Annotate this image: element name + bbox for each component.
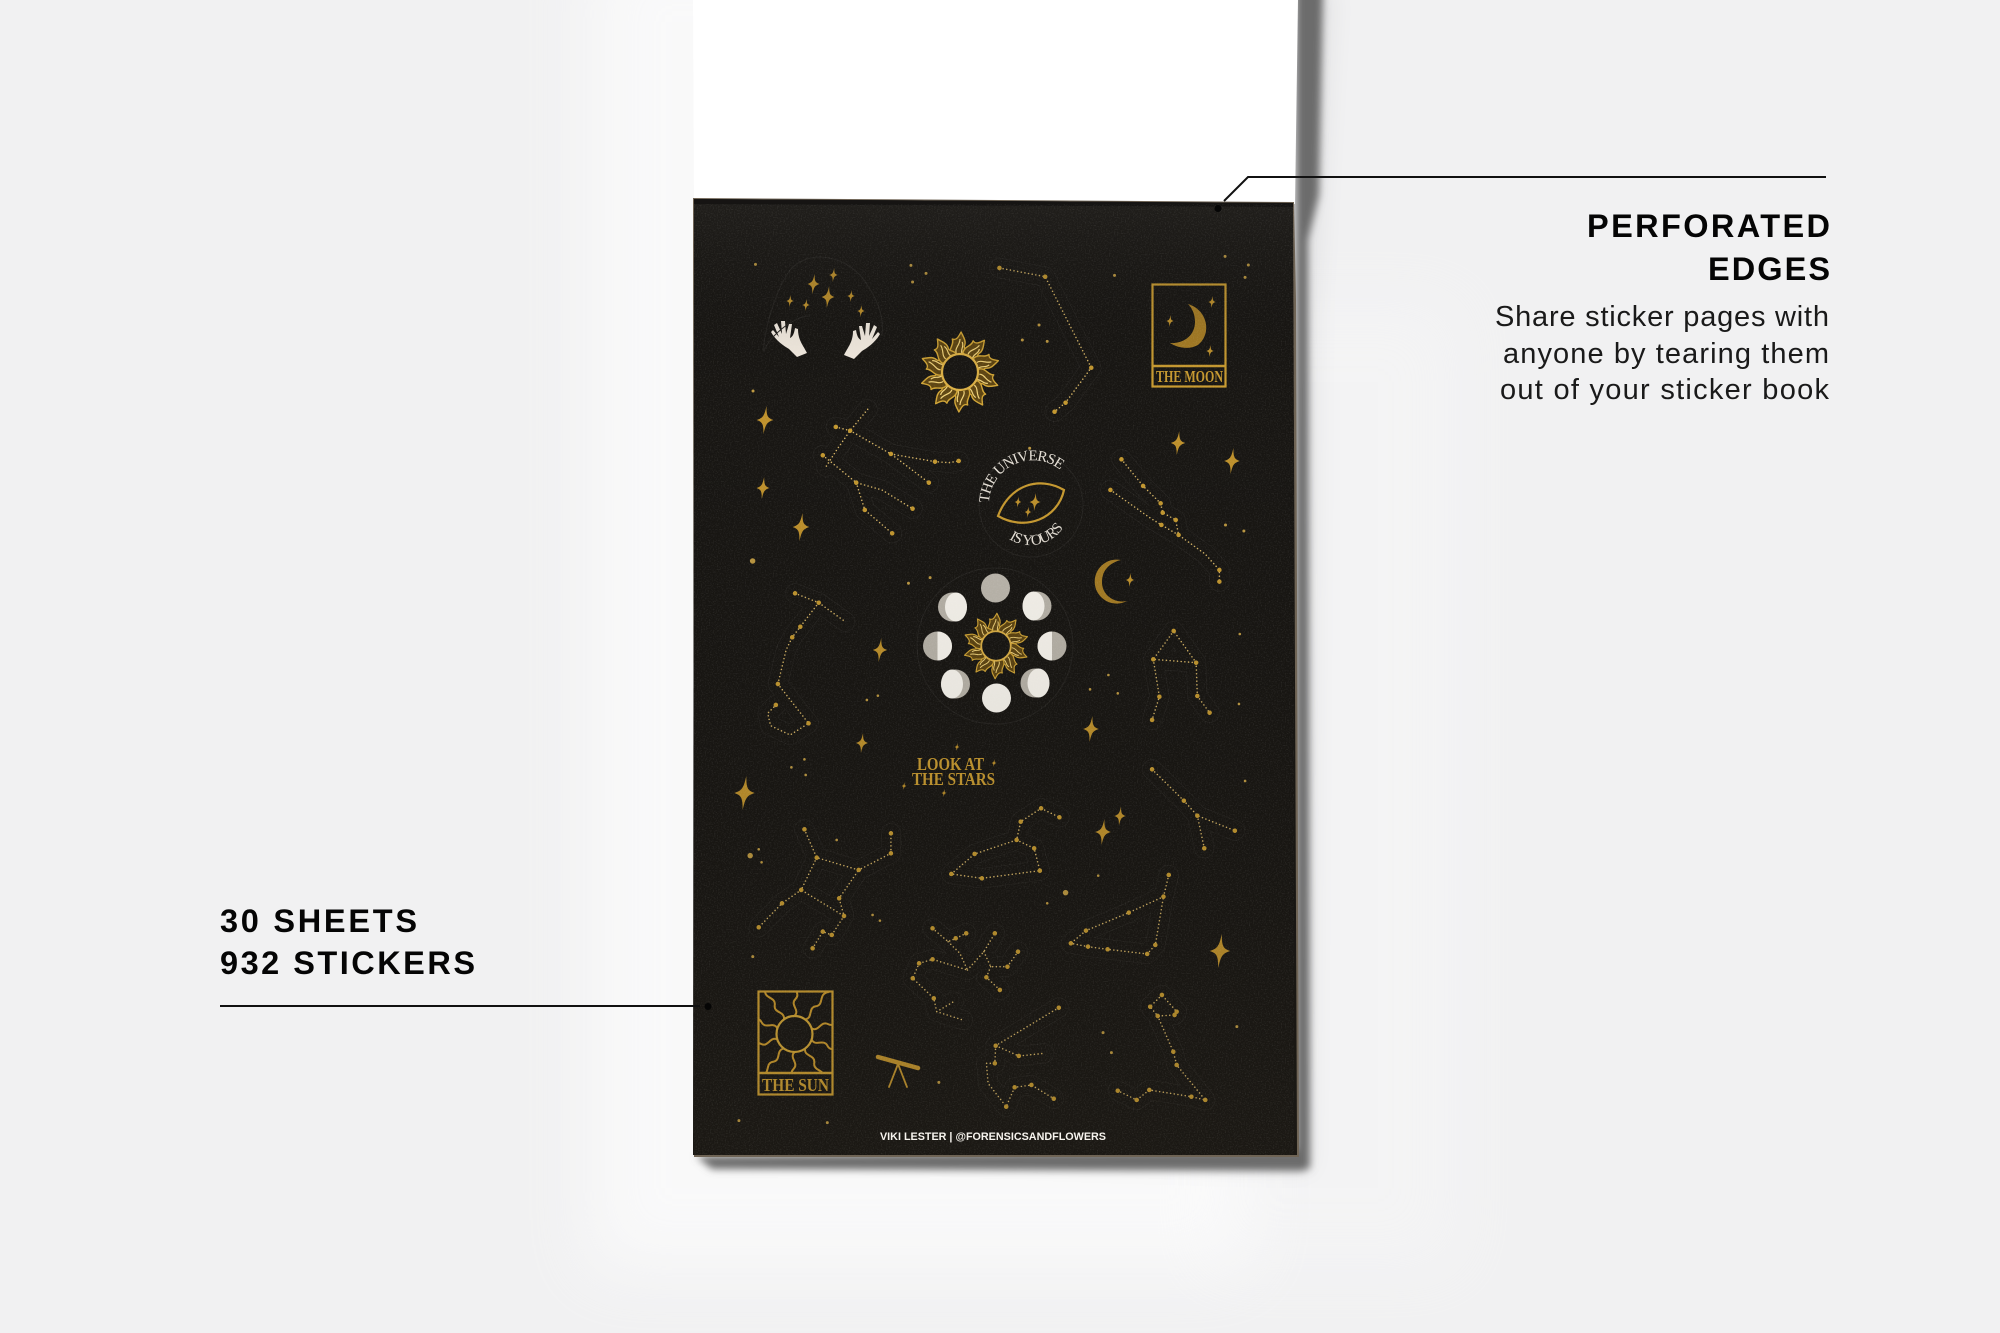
description: out of your sticker book — [1500, 374, 1830, 406]
sticker cut outlines — [759, 268, 1235, 1107]
constellation: right forked line — [1152, 769, 1235, 848]
sticker: hands reaching for stars — [764, 257, 882, 359]
heading — [220, 903, 475, 981]
constellation: bottom branching — [913, 928, 1018, 1020]
moon phase: lower left — [941, 670, 970, 698]
constellation: bottom centre — [986, 1008, 1059, 1107]
sticker book cover — [693, 198, 1299, 1157]
central sun — [962, 613, 1030, 679]
heading: 932 STICKERS — [220, 945, 475, 981]
constellation: triangle — [1071, 875, 1169, 954]
sticker: The Sun tarot card: THE SUN — [762, 1075, 829, 1095]
sticker: The Moon tarot card: THE MOON — [1156, 367, 1224, 386]
description: Share sticker pages with — [1495, 301, 1829, 333]
book shadow — [696, 0, 1335, 1172]
description — [1495, 301, 1830, 406]
leader line — [1214, 177, 1826, 212]
small four-point gold stars — [733, 406, 1241, 968]
sticker: moon phases with sun — [917, 568, 1073, 724]
white torn-back page — [693, 0, 1298, 204]
sticker: look at the stars: LOOK AT — [917, 754, 984, 774]
moon phase: new — [981, 574, 1010, 602]
description: anyone by tearing them — [1503, 338, 1829, 370]
moon phase: half right — [1038, 632, 1066, 660]
sticker: The Sun tarot card — [757, 990, 834, 1096]
sticker: gold sun — [919, 332, 1001, 412]
sticker: the universe is yours eye: IS YOURS — [1009, 522, 1062, 546]
callout: sheet and sticker count — [220, 903, 712, 1010]
credit line: VIKI LESTER | @FORENSICSANDFLOWERS — [880, 1131, 1106, 1143]
sticker: the universe is yours eye — [978, 450, 1084, 558]
sticker: look at the stars: THE STARS — [912, 769, 995, 789]
moon phase: lower right — [1020, 668, 1050, 698]
scattered gold dots — [739, 256, 1248, 1123]
constellation: large left figure — [759, 829, 891, 948]
constellation: bottom right loop — [1118, 995, 1205, 1100]
sticker: The Moon tarot card — [1152, 284, 1226, 386]
heading: EDGES — [1708, 251, 1830, 287]
constellation stickers — [759, 268, 1235, 1107]
constellation: centre lion — [951, 808, 1059, 878]
moon phase: upper left — [938, 592, 967, 622]
sticker: the universe is yours eye: THE UNIVERSE — [979, 450, 1064, 502]
constellation: left figure — [823, 409, 959, 533]
moon phase: full — [982, 684, 1011, 712]
constellation: right diagonal — [1110, 459, 1219, 582]
leader line — [220, 1003, 712, 1010]
heading: PERFORATED — [1587, 208, 1830, 244]
constellation: mid left hook — [768, 593, 845, 735]
callout: perforated edges — [1214, 177, 1830, 406]
heading: 30 SHEETS — [220, 903, 417, 939]
constellation: top arc — [999, 268, 1091, 412]
moon phase: half left — [923, 632, 952, 660]
heading — [1587, 208, 1830, 287]
moon phase: waning upper right — [1022, 592, 1052, 620]
sticker: gold crescent moon — [1095, 560, 1135, 604]
sticker: telescope — [878, 1057, 918, 1087]
constellation: house — [1152, 631, 1210, 720]
sticker: look at the stars — [901, 743, 997, 797]
paper grain overlay — [693, 199, 1297, 1155]
